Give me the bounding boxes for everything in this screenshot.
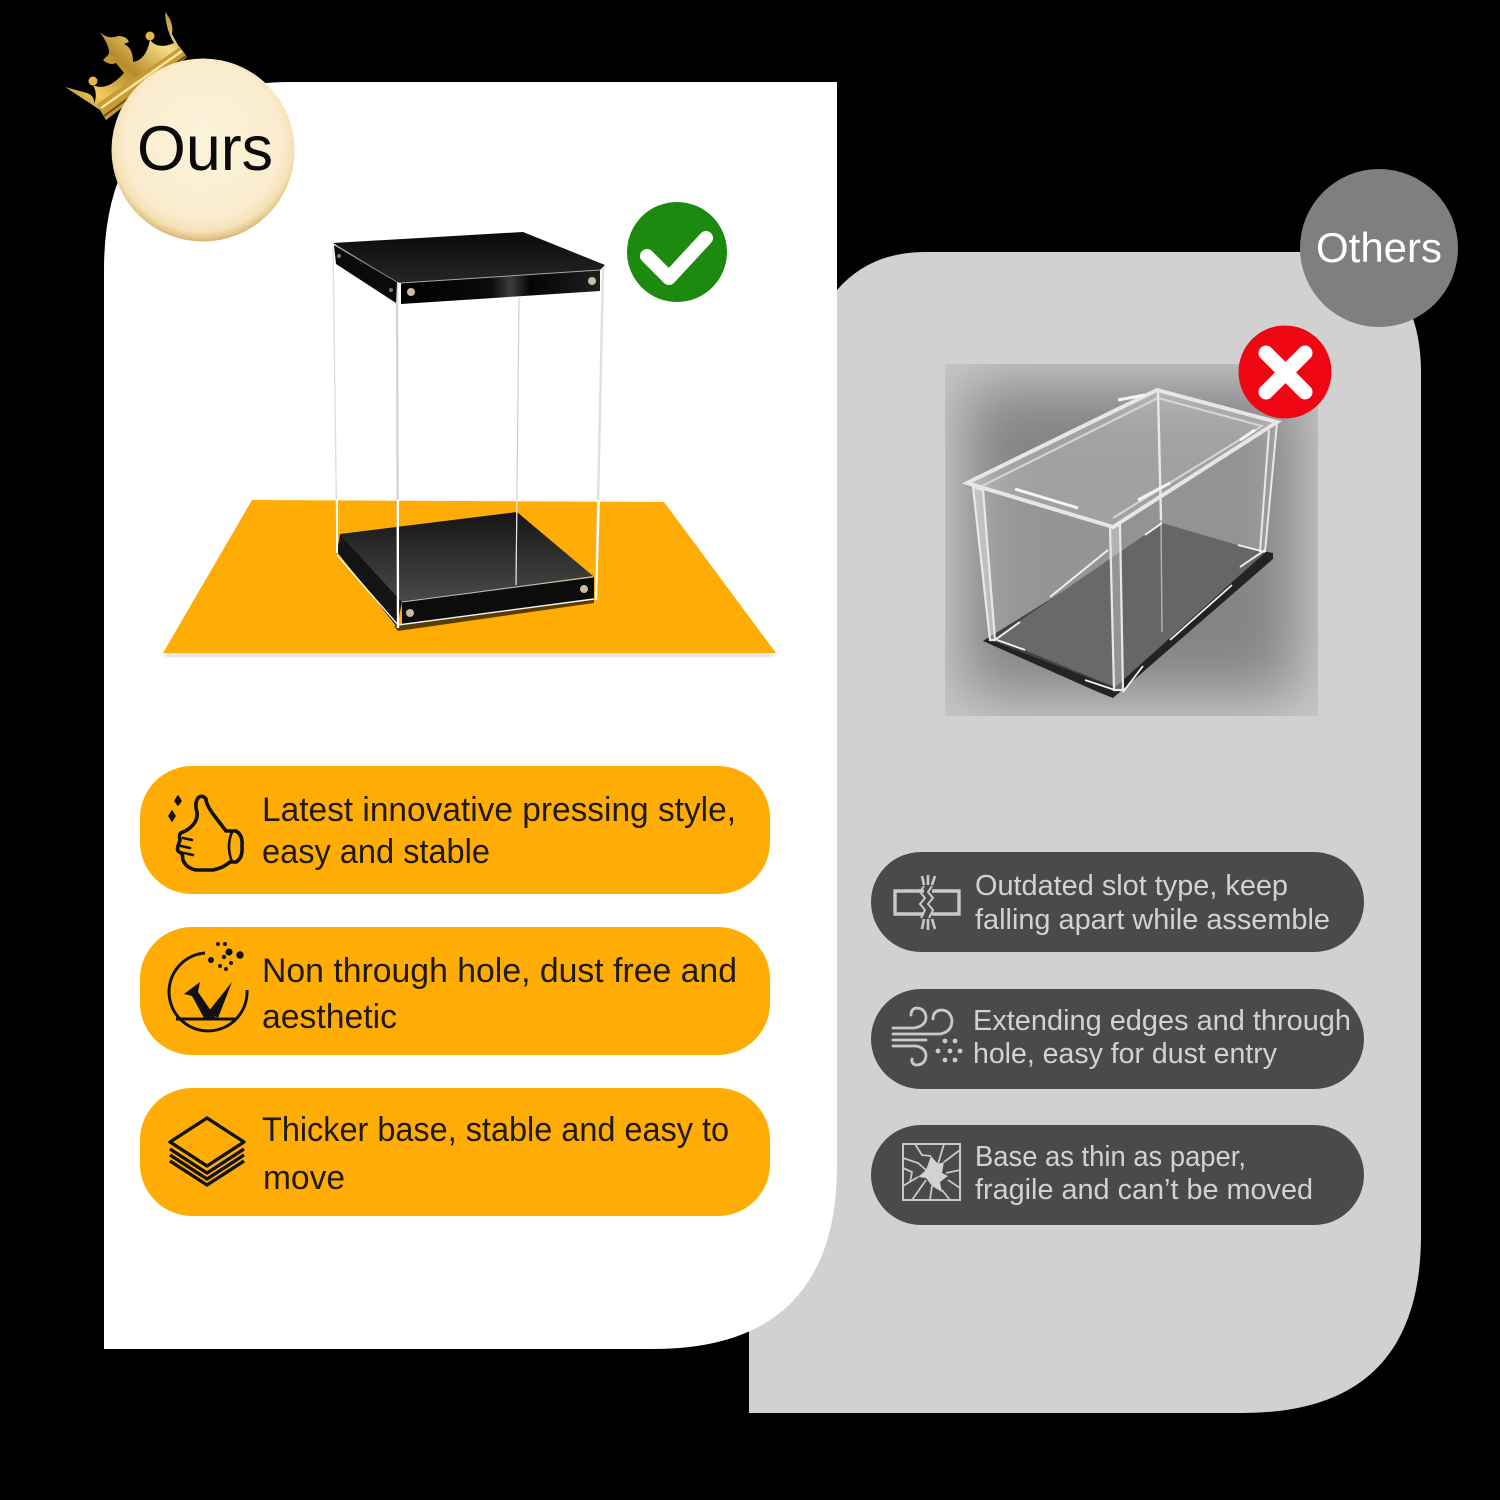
- feature text: Latest innovative pressing style,: [262, 791, 736, 829]
- product: orange floor mat: [163, 500, 776, 656]
- feature pill: dust free: aesthetic: [262, 998, 397, 1036]
- badge: others: Others: [1316, 224, 1442, 271]
- drawback text: Extending edges and through: [973, 1005, 1351, 1037]
- drawback pill: thin base: fragile and can’t be moved: [975, 1174, 1313, 1206]
- drawback pill: dust entry: [871, 989, 1364, 1089]
- drawback pill: thin base: [871, 1125, 1364, 1225]
- badge: ours: [65, 12, 294, 242]
- drawback pill: slot type: [871, 852, 1364, 952]
- coin circle: [112, 58, 294, 242]
- feature text: Thicker base, stable and easy to: [262, 1111, 729, 1149]
- icon: shattered panel: [903, 1144, 960, 1200]
- product: black and clear display case: [333, 232, 605, 631]
- panel: ours background: [104, 82, 837, 1349]
- box base: [983, 523, 1273, 698]
- icon: gold crown: [65, 12, 187, 120]
- box glass: [967, 390, 1277, 692]
- icon: thumbs up: [169, 796, 242, 870]
- icon: dust free check: [169, 942, 247, 1031]
- feature pill: pressing style: [140, 766, 770, 894]
- feature pill: dust free: [140, 927, 770, 1055]
- icon: red cross badge: [1238, 326, 1332, 418]
- panel: others background: [749, 252, 1421, 1413]
- icon: broken joint: [895, 875, 959, 930]
- feature pill: pressing style: easy and stable: [262, 833, 490, 871]
- badge: others: [1300, 169, 1458, 327]
- icon: stacked layers: [170, 1118, 244, 1185]
- feature pill: thicker base: [140, 1088, 770, 1216]
- icon: wind and dust: [893, 1008, 962, 1065]
- icon: green check badge: [627, 202, 727, 302]
- drawback pill: dust entry: hole, easy for dust entry: [973, 1038, 1277, 1070]
- case base: [337, 512, 594, 631]
- product photo: clear acrylic box: [945, 364, 1318, 716]
- feature text: Non through hole, dust free and: [262, 952, 737, 990]
- drawback pill: slot type: falling apart while assemble: [975, 904, 1330, 936]
- case clear walls: [333, 246, 603, 628]
- case top: [333, 232, 605, 304]
- drawback text: Outdated slot type, keep: [975, 870, 1288, 902]
- feature pill: thicker base: move: [263, 1159, 345, 1197]
- drawback text: Base as thin as paper,: [975, 1141, 1246, 1173]
- label: Ours: Ours: [137, 114, 273, 184]
